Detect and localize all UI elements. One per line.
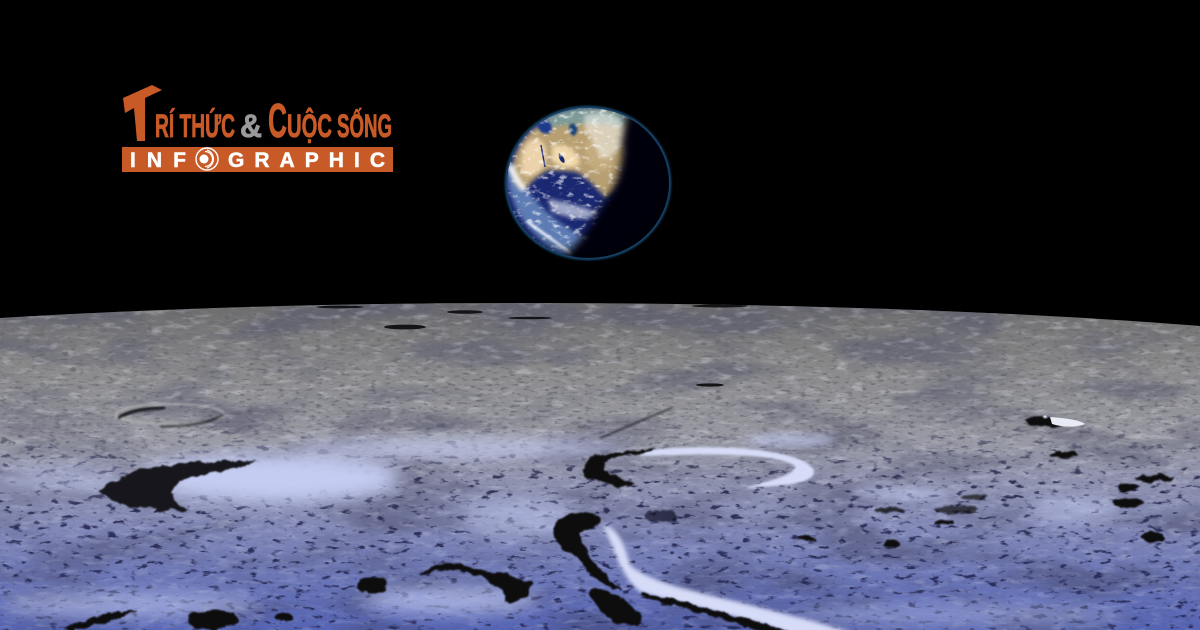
fine dark texture	[0, 300, 1200, 630]
crater: large left crater	[100, 461, 255, 511]
light speckle texture	[0, 300, 1200, 630]
crater: upper left ring	[116, 404, 224, 426]
bright rim arcs	[603, 416, 1052, 630]
logo wordmark: RÍ THỨC	[155, 108, 235, 144]
land: Africa, Arabia and Asia	[512, 110, 634, 198]
blue deepening toward foreground	[0, 472, 1200, 630]
coarse dark texture, lower surface	[0, 406, 1200, 630]
logo band text	[130, 149, 385, 172]
logo wordmark	[155, 95, 392, 148]
logo mark: roof-shaped T	[123, 85, 162, 141]
crater: centre shadow	[582, 448, 655, 487]
illustration: Earth	[505, 100, 680, 265]
crater: bright floor right	[1050, 417, 1085, 427]
logo band text: INF	[130, 149, 186, 172]
logo icon: concentric rings	[196, 148, 218, 170]
crater: right side small craters	[644, 418, 1175, 548]
bright ejecta patches	[0, 433, 1130, 627]
west ocean highlight	[506, 165, 590, 258]
seas	[537, 121, 552, 134]
logo wordmark: UỘC	[287, 108, 332, 144]
illustration: Moon surface	[0, 300, 1200, 630]
land: brighter deserts	[521, 139, 546, 176]
logo band	[122, 147, 393, 172]
distant horizon craters	[316, 304, 748, 387]
moon base tone	[0, 300, 1200, 630]
night side	[562, 115, 669, 258]
crater: winding rille shadows	[60, 514, 790, 630]
rille crack	[600, 408, 672, 438]
logo wordmark: SỐNG	[337, 108, 392, 144]
land: Europe and Asia green-blue	[545, 108, 630, 128]
earth globe surface	[507, 108, 669, 258]
earth atmosphere rim	[506, 107, 670, 259]
low-frequency mottling	[0, 300, 1200, 630]
logo wordmark: C	[268, 95, 287, 148]
limb shade	[512, 110, 628, 258]
logo band text: GRAPHIC	[228, 149, 385, 172]
logo: Tri thuc & Cuoc song Infographic	[122, 85, 393, 172]
clouds	[505, 107, 630, 259]
logo wordmark: &	[240, 108, 262, 144]
